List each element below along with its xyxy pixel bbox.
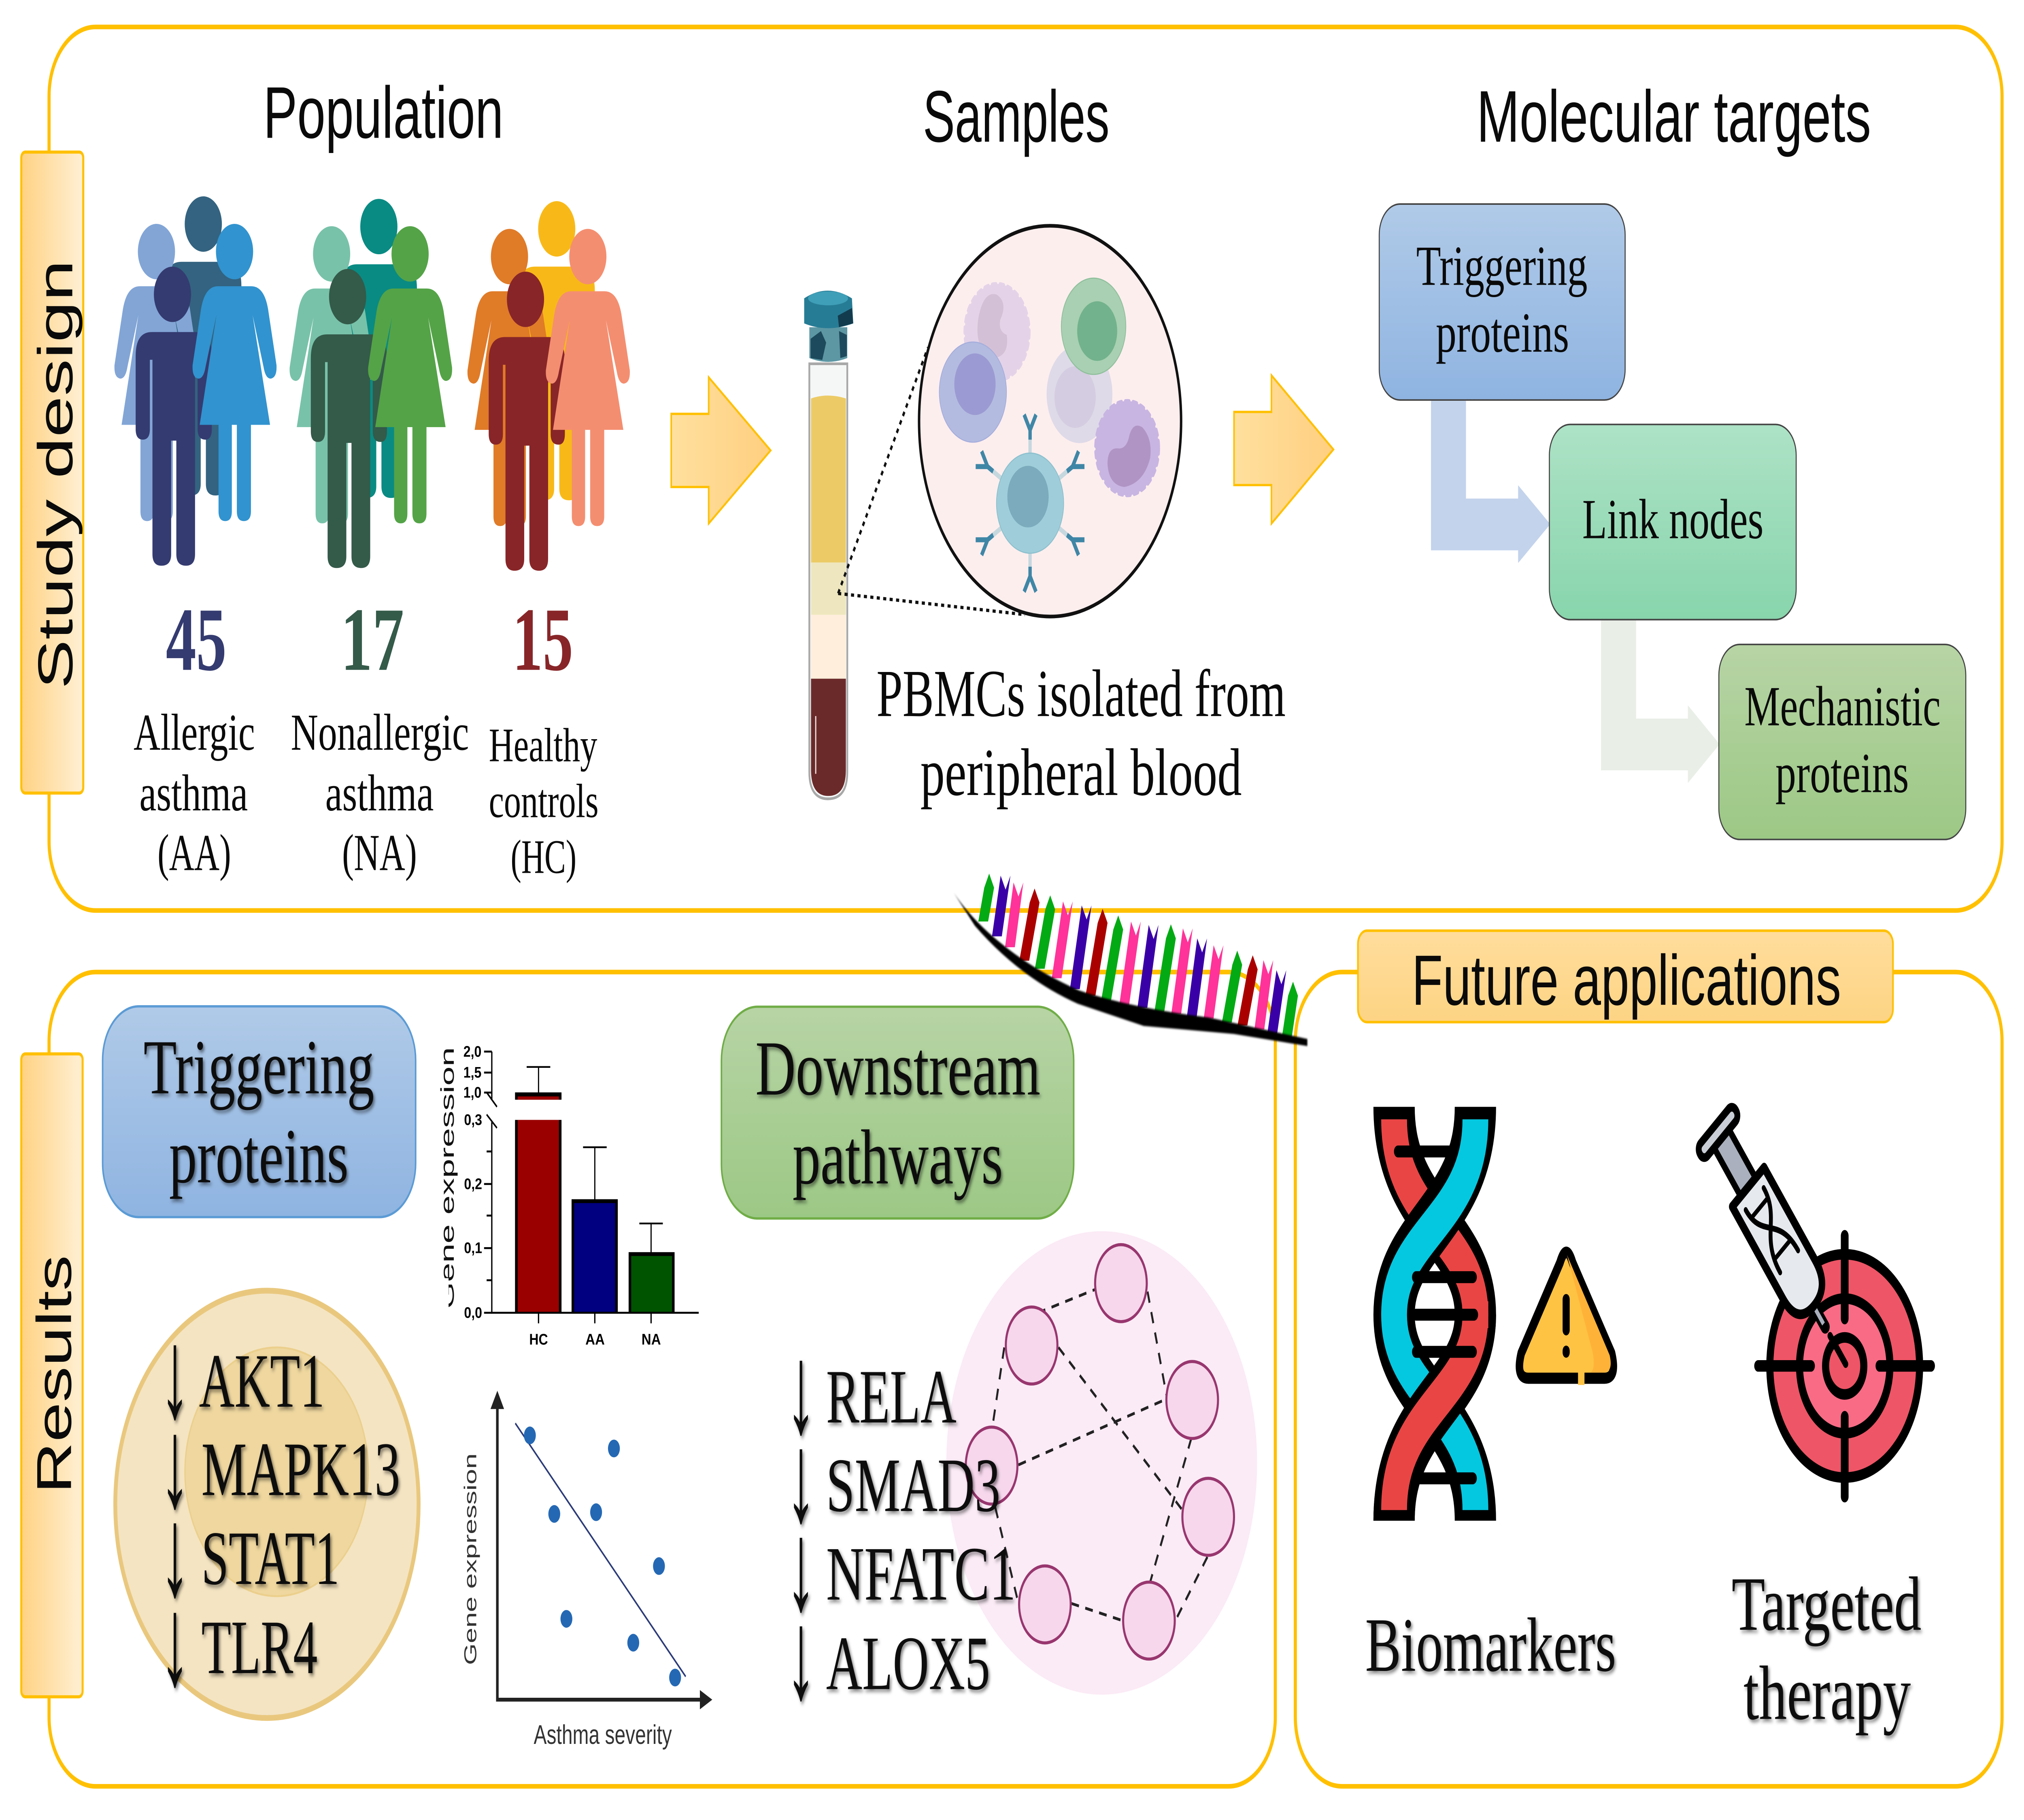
list: triggering proteins genes: MAPK13 <box>201 1427 400 1512</box>
list: downstream genes: RELA <box>826 1354 957 1439</box>
box: downstream pathways heading: Downstream <box>755 1025 1040 1112</box>
number: 15: 15 <box>512 589 573 690</box>
number: 45: 45 <box>166 589 227 690</box>
icon: allergic asthma people <box>115 196 276 566</box>
label: healthy controls: Healthy <box>489 719 597 772</box>
axis tick labels: 2,0 <box>463 1043 481 1060</box>
arrow: population to samples <box>671 377 771 523</box>
axis tick labels: 0,1 <box>464 1240 482 1257</box>
label: targeted therapy: Targeted <box>1732 1562 1921 1647</box>
sidebar: results <box>21 1054 83 1697</box>
heading: future applications <box>1358 931 1893 1022</box>
axis tick labels: NA <box>642 1331 661 1348</box>
text: PBMCs isolated from peripheral blood: PBMCs isolated from <box>876 656 1286 731</box>
list: triggering proteins genes: ↓ <box>160 1482 190 1622</box>
label: allergic asthma: Allergic <box>134 704 255 761</box>
box: link nodes <box>1549 425 1796 620</box>
text: PBMCs isolated from peripheral blood <box>876 656 1286 810</box>
label: healthy controls: controls <box>489 774 599 827</box>
list: downstream genes: ↓ <box>786 1585 816 1725</box>
heading: future applications: Future applications <box>1412 940 1841 1020</box>
list: downstream genes <box>786 1319 1016 1725</box>
sidebar: results: Results <box>27 1255 81 1494</box>
cell: teal B cell with antibodies <box>976 415 1084 592</box>
list: triggering proteins genes: ↓ <box>160 1393 190 1534</box>
box: triggering proteins: Triggering <box>1416 234 1588 297</box>
label: targeted therapy <box>1732 1562 1921 1736</box>
label: targeted therapy: therapy <box>1743 1651 1911 1736</box>
list: triggering proteins genes: STAT1 <box>201 1516 340 1601</box>
panel: future applications <box>1295 931 2002 1786</box>
list: downstream genes: ↓ <box>786 1319 816 1460</box>
cell: back monocyte <box>965 284 1029 380</box>
list: downstream genes: SMAD3 <box>826 1443 1000 1528</box>
icon: cell circle <box>115 1291 419 1718</box>
axis tick labels: 0,0 <box>464 1304 482 1321</box>
axis tick labels: 1,5 <box>463 1064 481 1081</box>
axis tick labels: 0,3 <box>464 1111 482 1128</box>
list: downstream genes: NFATC1 <box>826 1532 1016 1617</box>
icon: healthy controls people <box>468 201 630 571</box>
label: healthy controls <box>489 719 599 883</box>
label: nonallergic asthma <box>291 704 469 882</box>
bar: NA <box>629 1223 674 1313</box>
box: triggering proteins: proteins <box>1436 301 1569 364</box>
icon: syringe with DNA <box>1697 1104 1864 1386</box>
number: 17: 17 <box>341 589 404 690</box>
heading: molecular targets: Molecular targets <box>1477 76 1871 157</box>
axis tick labels: HC <box>529 1331 548 1348</box>
cell: green lymphocyte <box>1061 278 1126 374</box>
axis tick labels <box>463 1043 661 1348</box>
icon: warning triangle <box>1520 1252 1614 1385</box>
icon: PBMC cell circle <box>919 226 1181 617</box>
x axis title: Asthma severity <box>534 1720 672 1750</box>
diagram: protein network <box>946 1231 1257 1695</box>
icon: target <box>1758 1236 1931 1497</box>
bar: HC <box>515 1067 561 1313</box>
list: triggering proteins genes: ↓ <box>160 1571 190 1712</box>
data points <box>524 1427 681 1686</box>
box: downstream pathways heading <box>721 1007 1074 1218</box>
chart axes <box>484 1052 699 1323</box>
axis tick labels: 1,0 <box>463 1084 481 1101</box>
sidebar: study design: Study design <box>28 260 83 689</box>
label: allergic asthma <box>134 704 255 882</box>
icon: DNA sequencing ladder <box>954 874 1308 1046</box>
label: allergic asthma: (AA) <box>157 824 231 882</box>
box: link nodes: Link nodes <box>1582 488 1764 551</box>
heading: samples: Samples <box>923 76 1110 157</box>
icon: nonallergic asthma people <box>289 199 452 568</box>
label: nonallergic asthma: (NA) <box>342 824 417 882</box>
box: mechanistic proteins: Mechanistic <box>1744 675 1941 738</box>
list: triggering proteins genes: AKT1 <box>199 1339 325 1424</box>
arrow: samples to molecular targets <box>1234 375 1333 523</box>
list: downstream genes: ↓ <box>786 1408 816 1548</box>
cell: grey lymphocyte <box>1046 345 1112 443</box>
bar: AA <box>572 1147 618 1313</box>
axis tick labels: 0,2 <box>464 1176 482 1193</box>
list: triggering proteins genes: ↓ <box>160 1303 190 1444</box>
text: PBMCs isolated from peripheral blood: peripheral blood <box>921 735 1242 810</box>
network nodes <box>966 1245 1234 1659</box>
cell: blue lymphocyte <box>939 342 1006 442</box>
icon: DNA double helix <box>1394 1107 1475 1521</box>
sidebar: study design <box>21 152 83 793</box>
panel: results <box>21 972 1276 1786</box>
box: downstream pathways heading: pathways <box>793 1114 1003 1201</box>
box: triggering proteins heading <box>103 1006 416 1217</box>
label: allergic asthma: asthma <box>139 764 248 822</box>
icon: blood collection tube <box>804 291 853 799</box>
network edges <box>991 1290 1208 1621</box>
box: triggering proteins heading: Triggering <box>144 1025 374 1110</box>
box: triggering proteins heading: proteins <box>169 1113 349 1199</box>
label: biomarkers: Biomarkers <box>1365 1603 1616 1688</box>
y axis title: gene expression: Gene expression <box>437 1047 458 1309</box>
list: downstream genes: ↓ <box>786 1496 816 1637</box>
axis tick labels: AA <box>585 1331 605 1348</box>
box: triggering proteins <box>1379 204 1625 400</box>
box: mechanistic proteins <box>1719 644 1966 840</box>
box: mechanistic proteins: proteins <box>1775 742 1909 804</box>
arrow: triggering to link nodes <box>1431 400 1550 563</box>
label: nonallergic asthma: Nonallergic <box>291 704 469 761</box>
list: triggering proteins genes <box>160 1303 400 1712</box>
label: healthy controls: (HC) <box>510 830 576 883</box>
cell: violet monocyte <box>1095 401 1159 495</box>
arrow: link nodes to mechanistic <box>1601 620 1720 783</box>
scatter plot: gene expression vs asthma severity <box>461 1391 712 1750</box>
panel: study design <box>21 27 2002 910</box>
heading: population: Population <box>264 72 504 153</box>
list: triggering proteins genes: TLR4 <box>201 1605 317 1690</box>
y axis title: Gene expression <box>461 1453 480 1665</box>
dotted zoom lines <box>838 347 1025 614</box>
list: downstream genes: ALOX5 <box>826 1621 990 1706</box>
bar chart: gene expression by group <box>436 1043 699 1348</box>
label: nonallergic asthma: asthma <box>325 764 434 822</box>
